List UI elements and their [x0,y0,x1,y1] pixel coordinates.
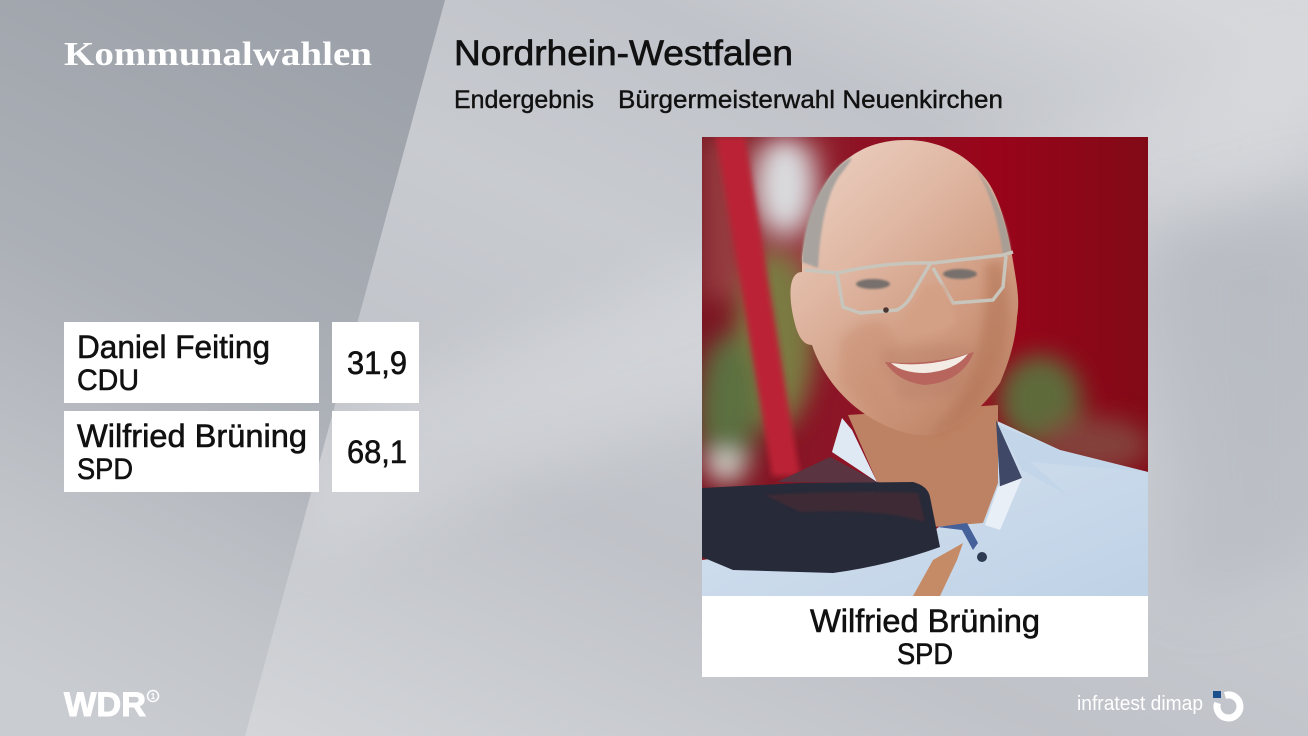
jacket lining behind shoulder [777,457,880,483]
nose [940,282,954,305]
face shading [840,322,894,394]
head [790,140,1018,435]
smile [886,347,963,394]
result row: Wilfried Brüning: SPD [77,453,133,486]
caption box: Wilfried Brüning SPD: SPD [897,638,953,671]
portrait photo of the winner [698,137,1150,596]
result row: Daniel Feiting: CDU [77,364,139,397]
result row: Wilfried Brüning: 68,1 [347,434,407,470]
hair at temples [802,158,851,268]
title: Kommunalwahlen: Kommunalwahlen [64,36,372,73]
caption box: Wilfried Brüning SPD [702,596,1148,677]
logo: WDR: 1 [151,692,156,701]
result row: Daniel Feiting [64,322,419,403]
logo: infratest dimap: infratest dimap [1077,693,1203,715]
subheading: Bürgermeisterwahl Neuenkirchen: Bürgermeisterwahl Neuenkirchen [618,86,1003,114]
result row: Daniel Feiting: Daniel Feiting [77,329,270,365]
heading: Nordrhein-Westfalen: Nordrhein-Westfalen [454,34,793,73]
result row: Wilfried Brüning [64,411,419,492]
glasses [805,252,1013,313]
jacket over shoulder [702,482,940,573]
logo: WDR: WDR [64,686,146,724]
neck [848,405,998,527]
fingers and shirt detail [913,543,963,596]
shirt collar left [832,418,877,482]
eyes [856,279,890,289]
subheading: Endergebnis: Endergebnis [454,86,594,114]
result row: Daniel Feiting: 31,9 [347,345,407,381]
shirt [702,420,1148,596]
logo: infratest dimap [1077,691,1240,718]
caption box: Wilfried Brüning SPD: Wilfried Brüning [810,603,1040,639]
shirt collar right [998,426,1148,472]
result row: Wilfried Brüning: Wilfried Brüning [77,418,307,454]
mole [883,307,889,313]
